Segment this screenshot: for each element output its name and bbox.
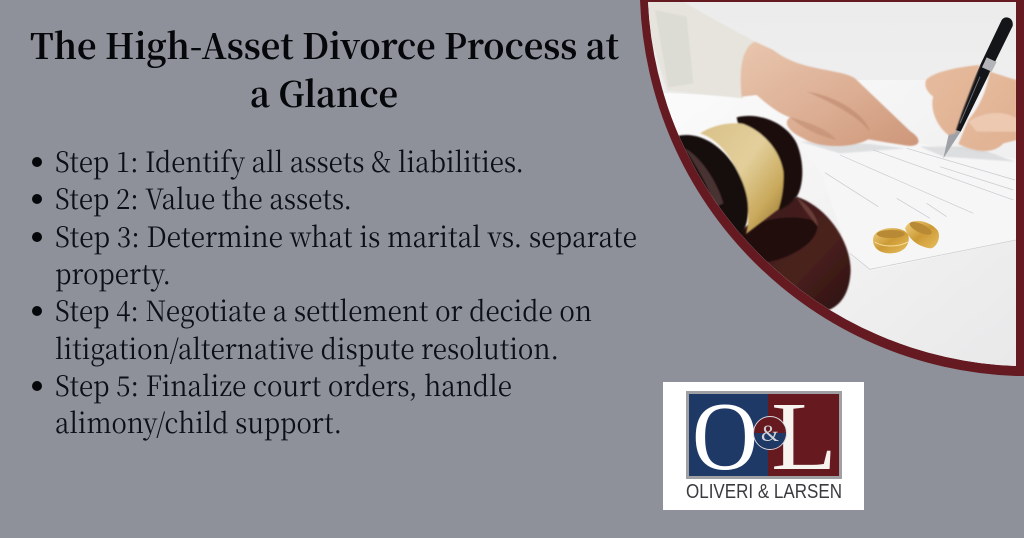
pen <box>943 17 1013 158</box>
step 3: property. <box>55 253 171 293</box>
step list <box>32 141 637 442</box>
table <box>663 80 1016 366</box>
step 3 <box>32 216 637 293</box>
logo emblem: O <box>692 383 758 491</box>
gavel base <box>740 197 851 311</box>
gavel head <box>670 116 802 237</box>
step 2: Step 2: Value the assets. <box>55 178 352 218</box>
step 5 <box>32 365 512 442</box>
step 5: Step 5: Finalize court orders, handle <box>55 365 512 405</box>
step 4 <box>32 290 592 368</box>
pointing hand <box>741 42 918 146</box>
logo wordmark: OLIVERI & LARSEN <box>686 481 842 503</box>
step 4: Step 4: Negotiate a settlement or decide on <box>55 290 592 330</box>
logo emblem: L <box>771 383 837 491</box>
title: a Glance <box>250 68 398 118</box>
sleeve <box>647 2 755 98</box>
step 1: Step 1: Identify all assets & liabilities. <box>55 141 524 181</box>
writing hand <box>925 65 1017 151</box>
step 5: alimony/child support. <box>55 402 342 442</box>
paper with text lines <box>800 142 1024 271</box>
step 3: Step 3: Determine what is marital vs. separate <box>55 216 637 256</box>
maroon frame behind photo <box>640 0 1024 376</box>
logo: Oliveri & Larsen <box>663 382 864 510</box>
wedding rings <box>873 219 939 253</box>
photo: gavel, hands and rings <box>640 0 1024 380</box>
title <box>30 20 619 118</box>
step 4: litigation/alternative dispute resolution. <box>55 328 559 368</box>
logo emblem <box>686 383 842 491</box>
logo emblem: & <box>761 421 779 446</box>
title: The High-Asset Divorce Process at <box>30 20 619 70</box>
